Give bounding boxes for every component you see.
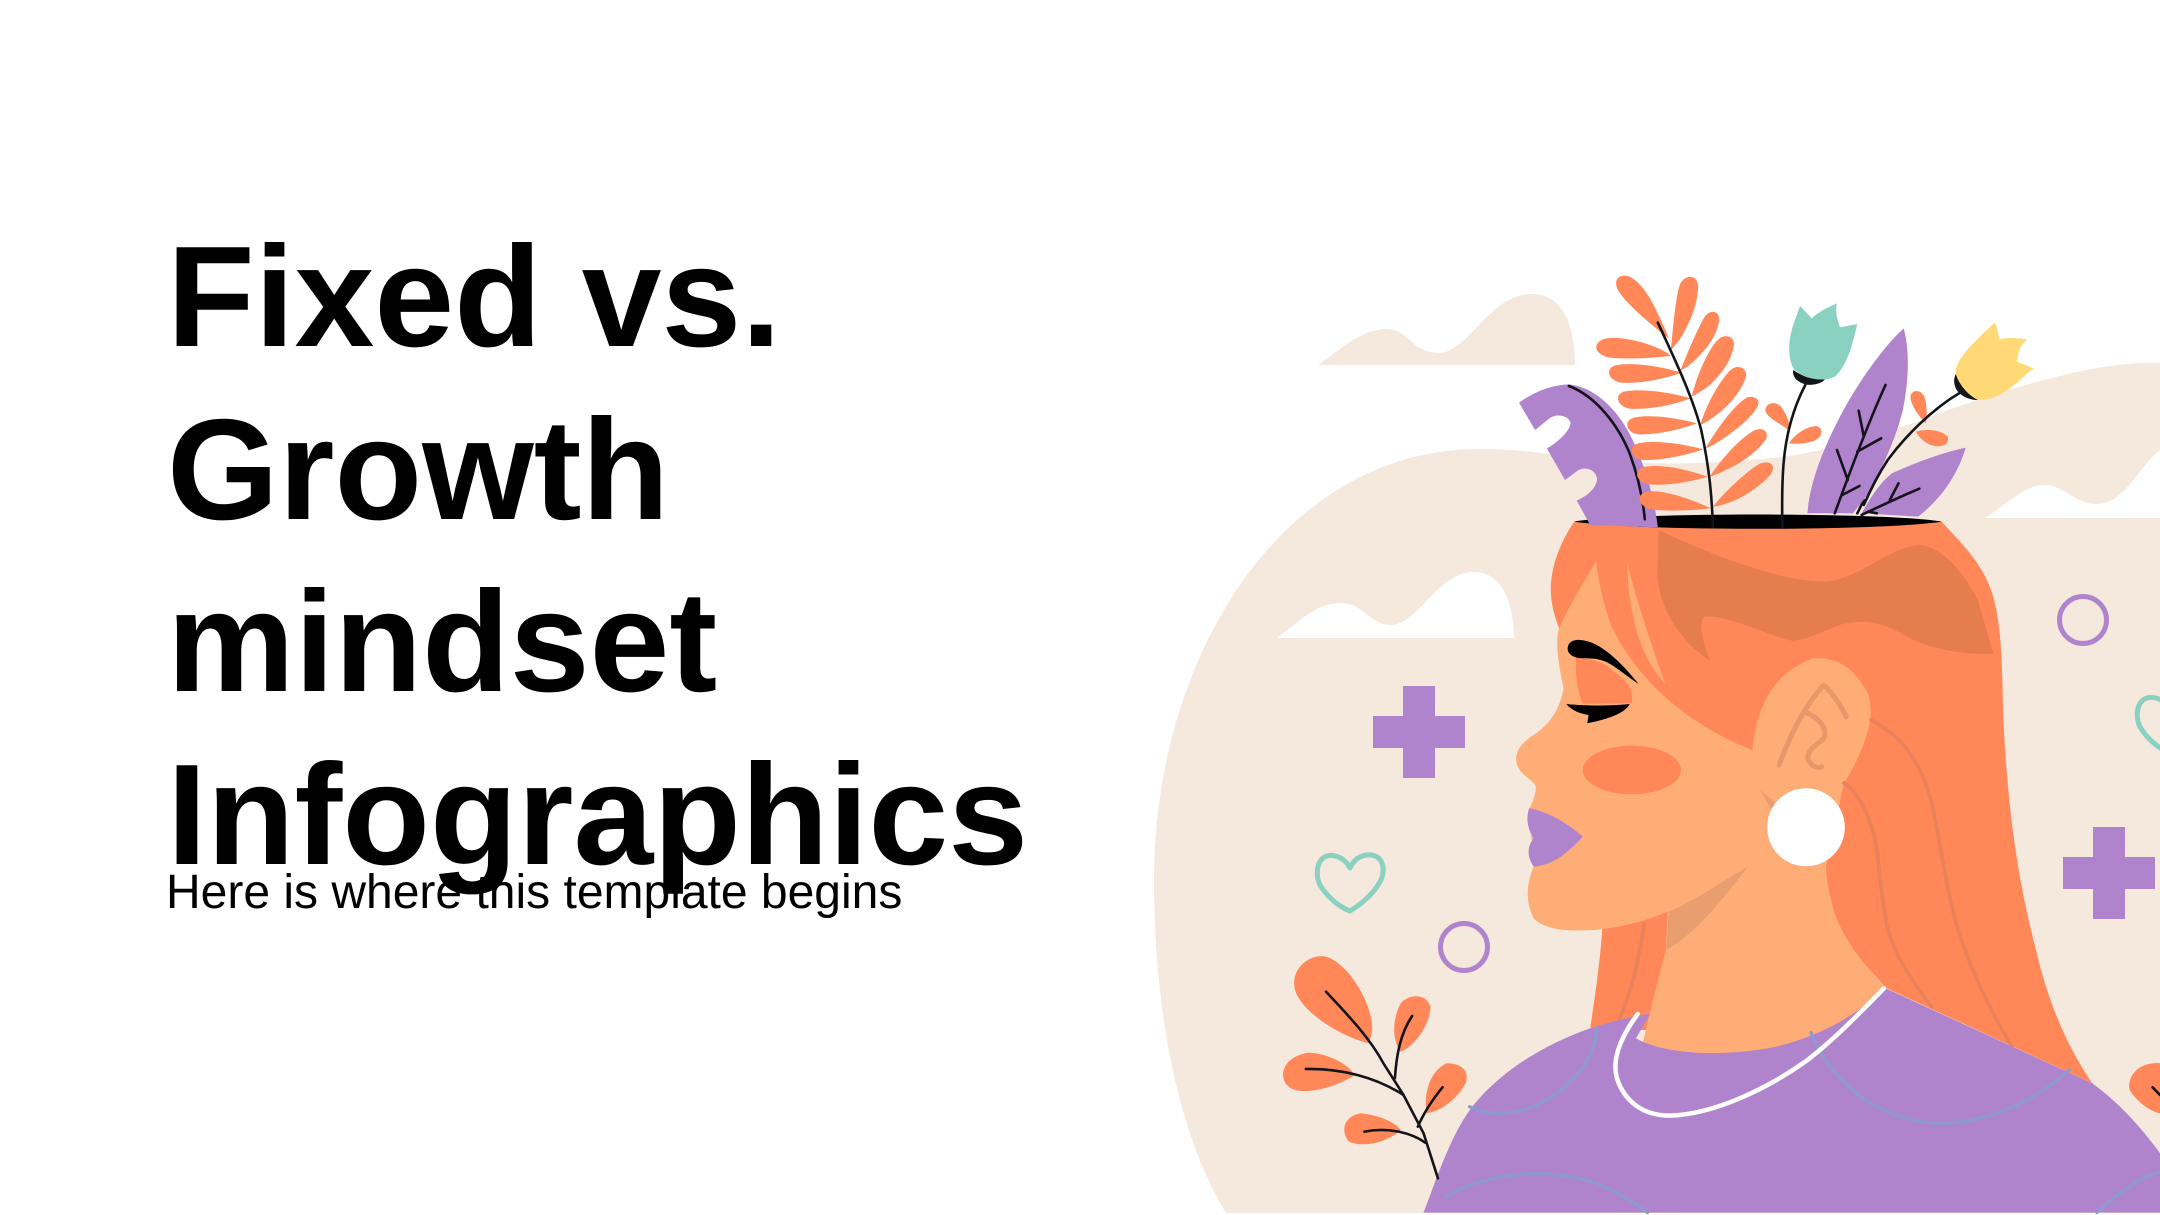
purple leaf: tall	[1807, 328, 1908, 513]
hair: strip behind neck	[1590, 900, 1680, 1030]
earring	[1767, 788, 1845, 866]
ear lines	[1779, 685, 1846, 768]
branch: lower left	[1283, 956, 1467, 1178]
skin: face, ear and neck	[1516, 562, 1886, 1073]
hair: face-framing sliver	[1627, 563, 1665, 684]
head opening	[1574, 515, 1942, 529]
neck shadow	[1666, 867, 1748, 950]
icon: ring top right	[2060, 596, 2106, 644]
title	[167, 217, 1028, 895]
necklace	[1615, 988, 1884, 1116]
eyebrow	[1568, 640, 1639, 684]
icon: plus right	[2063, 827, 2155, 919]
cheek	[1583, 746, 1681, 794]
flower: yellow	[1864, 323, 2034, 505]
head and face	[1516, 515, 1993, 1073]
cloud: right white	[1985, 450, 2160, 518]
eyelash	[1566, 704, 1630, 723]
hair: dark shade	[1657, 530, 1993, 661]
fern	[1596, 276, 1773, 527]
lips	[1527, 808, 1583, 867]
title: mindset	[167, 562, 717, 722]
icon: heart left	[1317, 855, 1383, 911]
hair: back layer	[1551, 522, 2092, 1083]
subtitle: Here is where this template begins	[166, 866, 902, 919]
flower: teal	[1765, 303, 1857, 527]
shirt seams	[1447, 1028, 2160, 1213]
purple leaf: second small	[1857, 448, 1966, 517]
purple leaf: left notched	[1519, 384, 1658, 527]
icon: heart right	[2137, 697, 2160, 753]
cloud: middle white	[1277, 572, 1514, 638]
cloud: top beige	[1318, 294, 1575, 365]
eyelid	[1576, 657, 1632, 703]
title: Fixed vs.	[167, 217, 781, 377]
icon: plus left	[1373, 686, 1465, 778]
ear shadow	[1760, 790, 1775, 812]
shirt	[1424, 988, 2160, 1213]
leaf: right edge	[2129, 1063, 2160, 1113]
hair strands	[1619, 720, 2012, 1047]
lower body	[1283, 867, 2160, 1213]
title: Infographics	[167, 735, 1028, 895]
title: Growth	[167, 390, 669, 550]
plants growing from head	[1519, 276, 2034, 527]
icon: ring lower left	[1440, 924, 1488, 970]
background blob	[1154, 363, 2160, 1213]
